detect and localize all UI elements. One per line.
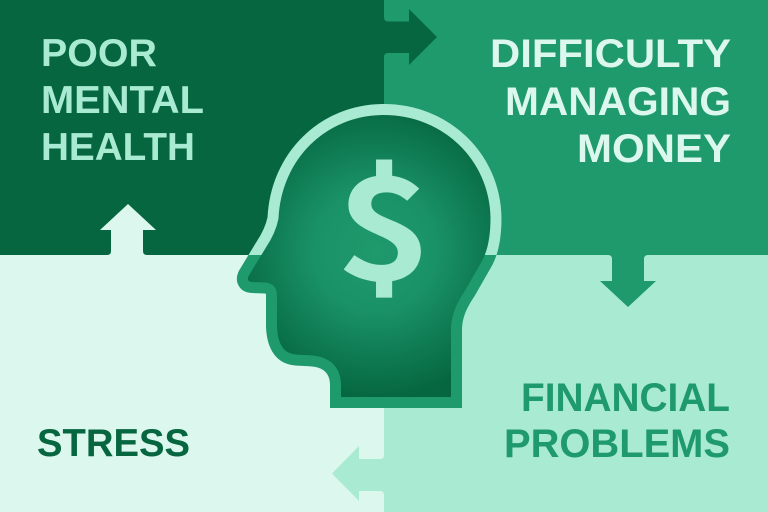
dollar sign: $ [336,115,432,322]
heading: difficulty managing money: DIFFICULTY [490,32,731,76]
heading: difficulty managing money [490,32,731,171]
panel: financial problems [384,255,768,512]
panel: poor mental health [0,0,384,255]
panel: stress [0,255,384,512]
head fill [242,110,496,402]
heading: difficulty managing money: MONEY [577,127,731,171]
head outline lower [236,255,496,408]
heading: poor mental health: POOR [41,32,157,75]
heading: stress: STRESS [37,422,190,465]
heading: poor mental health [41,32,204,169]
heading: financial problems: FINANCIAL [521,376,730,420]
heading: financial problems: PROBLEMS [504,422,730,466]
head outline upper [248,104,502,255]
heading: financial problems [504,376,730,466]
arrow: right [384,9,437,65]
icon: head with dollar sign [242,110,496,402]
arrow: up [100,204,156,255]
heading: poor mental health: MENTAL [41,79,204,122]
heading: difficulty managing money: MANAGING [505,80,731,124]
panel: difficulty managing money [384,0,768,255]
arrow: left [332,446,384,501]
arrow: down [600,255,656,307]
heading: poor mental health: HEALTH [41,126,195,169]
